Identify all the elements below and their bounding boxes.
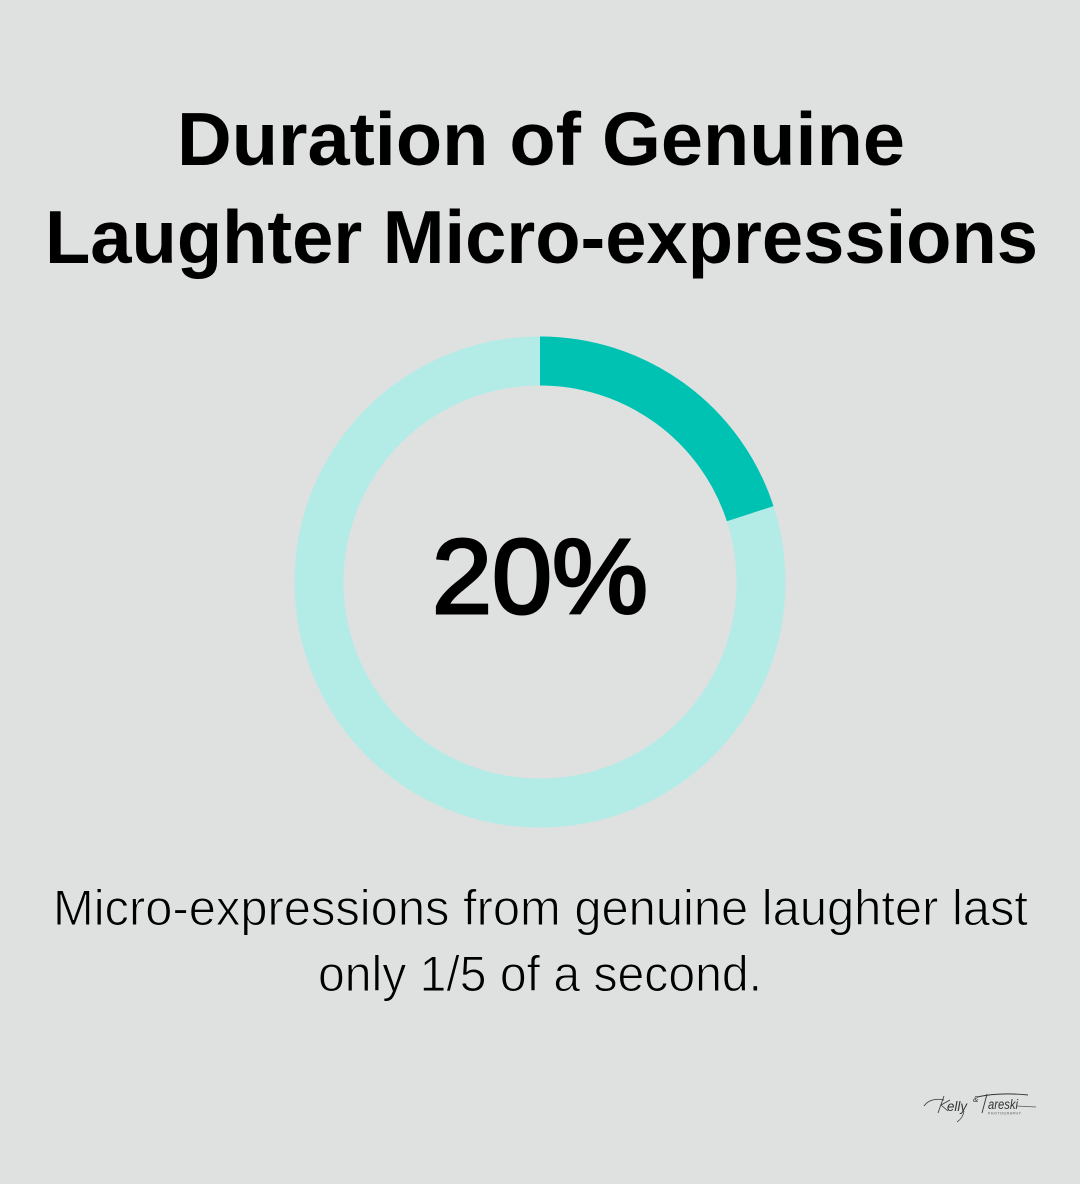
signature logo: PHOTOGRAPHY	[988, 1112, 1022, 1116]
signature logo: &	[973, 1095, 978, 1104]
title: Laughter Micro-expressions	[45, 195, 1038, 279]
description text: Micro-expressions from genuine laughter last	[53, 880, 1028, 936]
title: Duration of Genuine	[177, 97, 905, 181]
donut chart: 20%	[319, 361, 761, 803]
description text	[53, 880, 1028, 1002]
signature logo	[924, 1094, 1036, 1122]
signature logo: areski	[988, 1096, 1019, 1112]
description text: only 1/5 of a second.	[318, 946, 762, 1002]
title	[45, 97, 1038, 279]
percentage value: 20%	[432, 518, 648, 636]
signature logo: elly	[947, 1098, 968, 1114]
